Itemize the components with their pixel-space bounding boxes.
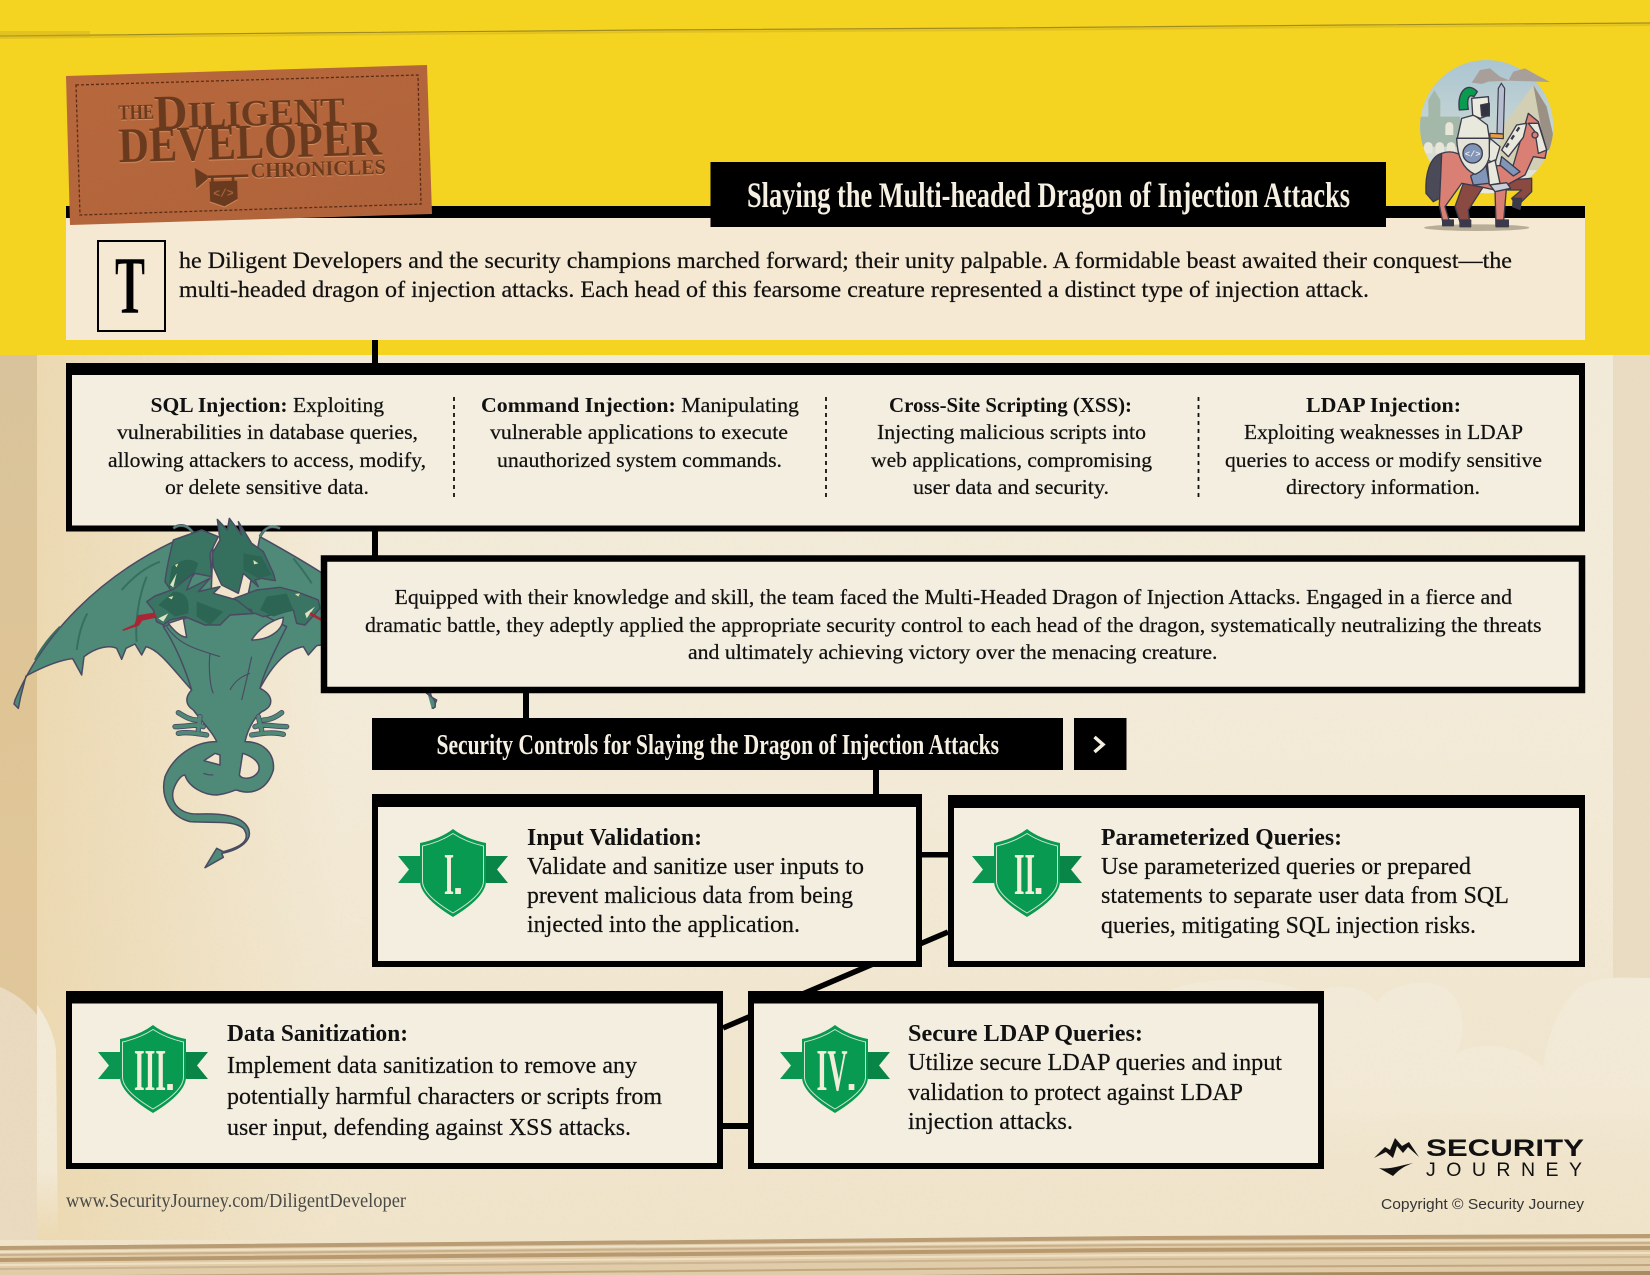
text: input validation: prevent malicious data from being	[527, 883, 853, 909]
panel: secure LDAP queries	[748, 991, 1323, 1166]
text: SQL injection: vulnerabilities in database queries,	[117, 420, 418, 444]
text: secure LDAP queries: Utilize secure LDAP queries and input	[908, 1050, 1282, 1076]
panel: battle narrative: dramatic battle, they adeptly applied the appropriate security control to each head of the dragon, systematically neutralizing the threats	[365, 613, 1542, 637]
intro text: he Diligent Developers and the security champions marched forward; their unity palpable. A formidable beast awaited their conquest—the	[179, 248, 1512, 273]
badge: III: III	[134, 1037, 166, 1103]
text: data sanitization: Implement data sanitization to remove any	[227, 1053, 637, 1079]
logo: security journey: SECURITY	[1426, 1135, 1584, 1162]
text: input validation: injected into the application.	[527, 912, 800, 938]
text: secure LDAP queries: validation to protect against LDAP	[908, 1080, 1243, 1106]
text: SQL injection	[108, 393, 426, 499]
text: command injection: Command Injection: Manipulating	[481, 393, 800, 417]
logo wordmark: ILIGENT	[187, 91, 345, 137]
panel: battle narrative: and ultimately achieving victory over the menacing creature.	[688, 640, 1218, 664]
drop cap	[98, 240, 165, 331]
shield emblem code mark: </>	[1465, 150, 1480, 160]
text: secure LDAP queries	[908, 1021, 1282, 1135]
tail holes	[168, 617, 283, 778]
heading: security controls	[372, 718, 1063, 770]
text: data sanitization: potentially harmful characters or scripts from	[227, 1084, 662, 1110]
logo wordmark: </>	[213, 188, 234, 201]
text: SQL injection: allowing attackers to access, modify,	[108, 448, 426, 472]
logo wordmark	[117, 78, 387, 210]
text: secure LDAP queries: Secure LDAP Queries:	[908, 1021, 1143, 1047]
panel: injection attack types	[66, 363, 1585, 528]
knight armour	[1457, 115, 1511, 192]
logo: leather patch	[60, 60, 440, 230]
panel: data sanitization	[66, 991, 723, 1166]
text: parameterized queries: Parameterized Queries:	[1101, 825, 1342, 851]
text: parameterized queries: queries, mitigating SQL injection risks.	[1101, 913, 1476, 939]
text: LDAP injection: queries to access or modify sensitive	[1225, 448, 1542, 472]
badge: IV: IV	[816, 1037, 848, 1103]
text: LDAP injection	[1225, 393, 1542, 499]
copyright: Copyright © Security Journey	[1381, 1196, 1585, 1213]
badge: IV	[780, 1025, 890, 1113]
icon: knight on horse	[1417, 57, 1557, 231]
wooden page edge	[0, 1235, 1650, 1275]
panel: battle narrative: Equipped with their knowledge and skill, the team faced the Multi-Headed Dragon of Injection Attacks. Engaged in a fierce and	[394, 585, 1513, 609]
knight scenery	[1417, 57, 1557, 197]
text: cross-site scripting: web applications, compromising	[871, 448, 1152, 472]
badge: II: II	[1014, 841, 1035, 907]
text: parameterized queries	[1101, 825, 1509, 939]
text: cross-site scripting	[871, 393, 1152, 499]
logo wordmark: DEVELOPER	[117, 109, 383, 173]
text: secure LDAP queries: injection attacks.	[908, 1109, 1073, 1135]
knight sword	[1490, 83, 1505, 139]
logo wordmark: CHRONICLES	[250, 155, 386, 183]
knight shadow	[1424, 224, 1529, 231]
text: command injection: unauthorized system commands.	[497, 448, 782, 472]
badge: III: .	[164, 1055, 176, 1099]
panel: intro	[66, 162, 1585, 340]
text: cross-site scripting: Cross-Site Scripting (XSS):	[889, 393, 1132, 417]
title banner	[710, 162, 1386, 227]
badge: I	[398, 829, 508, 917]
yellow header band	[0, 0, 1650, 355]
knight clouds	[1472, 68, 1550, 84]
logo: security journey: JOURNEY	[1426, 1159, 1582, 1181]
text: data sanitization: Data Sanitization:	[227, 1021, 408, 1047]
text: data sanitization	[227, 1021, 662, 1141]
dragon body and tail	[163, 600, 287, 868]
text: parameterized queries: Use parameterized queries or prepared	[1101, 854, 1471, 880]
footer url: www.SecurityJourney.com/DiligentDeveloper	[66, 1191, 406, 1212]
icon: multi-headed dragon	[14, 518, 437, 868]
text: LDAP injection: Exploiting weaknesses in LDAP	[1244, 420, 1523, 444]
logo wordmark: D	[153, 84, 188, 141]
badge: II: .	[1033, 859, 1044, 903]
text: cross-site scripting: Injecting malicious scripts into	[877, 420, 1146, 444]
logo wordmark: THE	[118, 102, 154, 125]
text: LDAP injection: LDAP Injection:	[1306, 393, 1461, 417]
text: input validation: Input Validation:	[527, 825, 702, 851]
text: SQL injection: SQL Injection: Exploiting	[150, 393, 385, 417]
intro text: multi-headed dragon of injection attacks. Each head of this fearsome creature represented a distinct type of injection attack.	[179, 277, 1369, 302]
connectors between panels	[372, 340, 950, 1129]
badge: IV: .	[846, 1055, 857, 1099]
badge: III	[98, 1025, 208, 1113]
text: input validation: Validate and sanitize user inputs to	[527, 854, 864, 880]
text: input validation	[527, 825, 864, 938]
dragon wings	[14, 537, 437, 708]
badge: II	[972, 829, 1082, 917]
dragon claws	[175, 713, 287, 735]
text: command injection: vulnerable applications to execute	[490, 420, 788, 444]
title banner: Slaying the Multi-headed Dragon of Injection Attacks	[747, 175, 1350, 215]
badge: I: .	[452, 859, 464, 903]
heading: security controls: Security Controls for Slaying the Dragon of Injection Attacks	[436, 730, 999, 761]
panel: battle narrative	[324, 558, 1582, 690]
text: parameterized queries: statements to separate user data from SQL	[1101, 883, 1509, 909]
badge: I: I	[444, 841, 454, 907]
dragon heads	[123, 518, 322, 630]
text: LDAP injection: directory information.	[1286, 475, 1480, 499]
icon: chevron arrow	[1074, 718, 1126, 770]
knight helmet and plume	[1459, 87, 1489, 118]
intro text	[179, 248, 1512, 302]
text: data sanitization: user input, defending against XSS attacks.	[227, 1115, 631, 1141]
text: cross-site scripting: user data and security.	[913, 475, 1109, 499]
panel: input validation	[372, 794, 922, 964]
drop cap: T	[115, 240, 145, 331]
logo: security journey	[1374, 1135, 1584, 1181]
horse	[1426, 113, 1547, 227]
panel: parameterized queries	[948, 795, 1585, 964]
text: command injection	[481, 393, 800, 472]
text: SQL injection: or delete sensitive data.	[165, 475, 369, 499]
